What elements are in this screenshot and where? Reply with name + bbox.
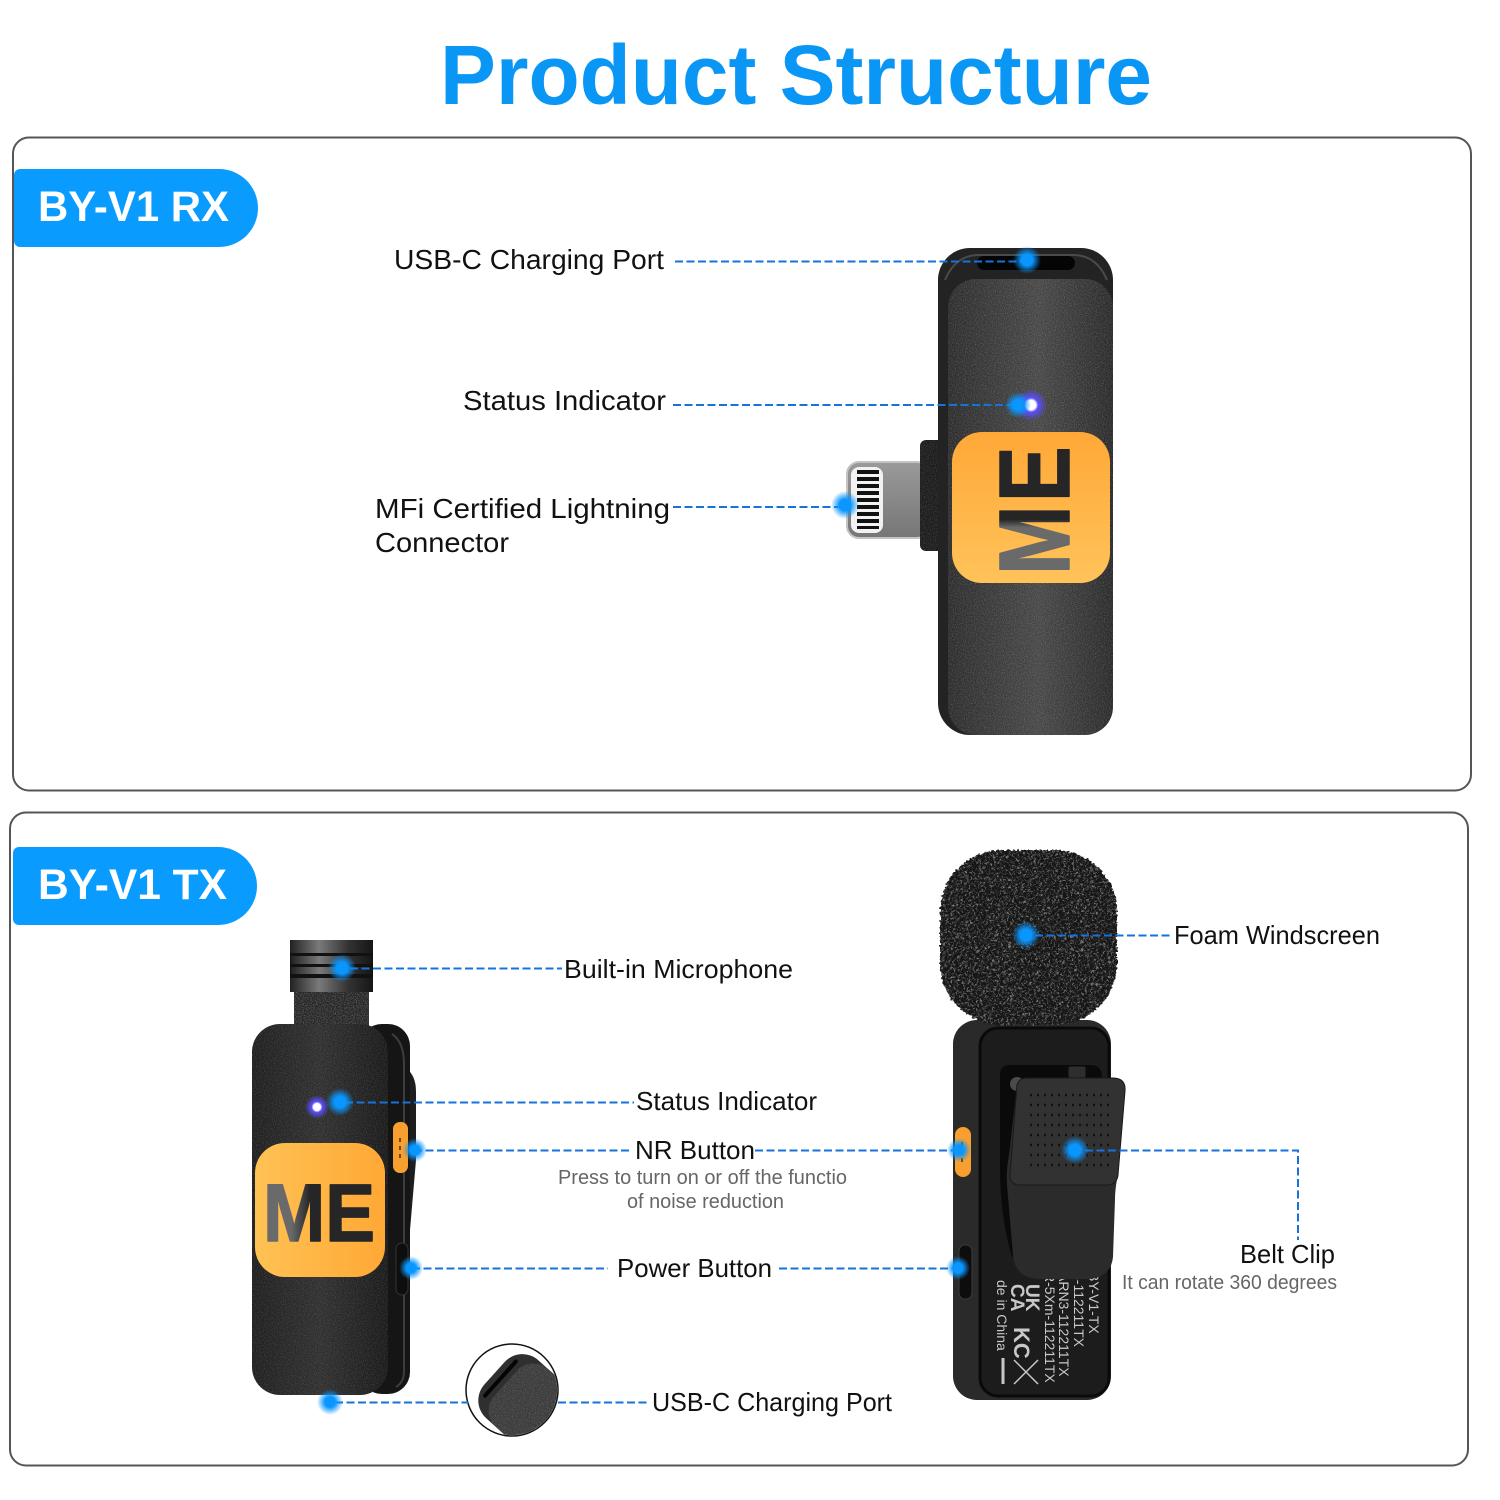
leader: status indicator — [463, 385, 1031, 418]
leader: lightning connector: MFi Certified Lightning — [375, 493, 670, 524]
leader: belt clip — [1061, 1136, 1337, 1294]
leader: power button — [399, 1253, 970, 1283]
foam windscreen — [940, 850, 1117, 1025]
regulatory markings: 3-112211TX — [1071, 1272, 1087, 1348]
leader: foam windscreen: Foam Windscreen — [1174, 920, 1380, 950]
device: RX receiver — [847, 248, 1113, 735]
ME logo plate — [952, 432, 1110, 583]
leader: built-in microphone: Built-in Microphone — [564, 954, 793, 984]
status LED — [1015, 389, 1047, 421]
leader: lightning connector: Connector — [375, 527, 509, 558]
leader: belt clip: It can rotate 360 degrees — [1122, 1272, 1337, 1294]
microphone head — [290, 940, 373, 1030]
device: TX front view — [252, 940, 416, 1395]
leader: foam windscreen — [1012, 920, 1380, 950]
title: Product Structure — [440, 28, 1152, 122]
ME logo plate: ME — [979, 443, 1091, 575]
leader: USB-C port — [394, 244, 1041, 275]
leader: USB-C charging port: USB-C Charging Port — [652, 1387, 893, 1417]
regulatory markings: de in China — [994, 1280, 1010, 1351]
side shell — [360, 1024, 410, 1394]
leader: USB-C charging port — [317, 1387, 893, 1417]
regulatory markings: CA — [1006, 1284, 1027, 1312]
leader: status indicator: Status Indicator — [463, 385, 666, 416]
regulatory markings — [994, 1272, 1102, 1384]
leader: power button: Power Button — [617, 1253, 772, 1283]
badge: BY-V1 RX: BY-V1 RX — [38, 183, 229, 231]
back panel — [980, 1028, 1109, 1396]
device: TX back view with foam and clip — [940, 850, 1125, 1400]
NR button — [393, 1122, 408, 1173]
status LED — [305, 1095, 329, 1119]
badge: BY-V1 TX — [13, 847, 257, 925]
power button — [959, 1245, 972, 1299]
regulatory markings: R-5Xm-112211TX — [1042, 1272, 1058, 1383]
leader: USB-C port: USB-C Charging Port — [394, 244, 664, 275]
leader: built-in microphone — [328, 954, 793, 984]
regulatory markings: BY-V1-TX — [1086, 1272, 1102, 1334]
leader: status indicator — [326, 1086, 817, 1116]
lightning connector — [847, 440, 950, 551]
front body — [252, 1024, 388, 1395]
regulatory markings: UK — [1021, 1284, 1042, 1312]
body — [953, 1020, 1111, 1400]
power button — [396, 1243, 408, 1295]
NR button — [955, 1127, 971, 1177]
regulatory markings: ARN3-112211TX — [1056, 1272, 1072, 1377]
ME logo plate — [255, 1143, 385, 1277]
regulatory markings: KC — [1009, 1327, 1034, 1359]
badge: BY-V1 RX — [14, 169, 258, 247]
inset: USB-C port close-up — [465, 1343, 559, 1437]
belt clip edge — [405, 1068, 416, 1230]
ME logo plate: ME — [263, 1168, 375, 1259]
badge: BY-V1 TX: BY-V1 TX — [38, 861, 227, 909]
leader: belt clip: Belt Clip — [1240, 1239, 1335, 1269]
belt clip — [1000, 1065, 1125, 1279]
leader: status indicator: Status Indicator — [636, 1086, 817, 1116]
receiver body — [938, 248, 1113, 735]
panel: BY-V1 TX — [10, 812, 1468, 1466]
panel: BY-V1 RX — [13, 138, 1471, 790]
leader: NR button: NR Button — [635, 1135, 755, 1165]
leader: NR button — [403, 1135, 971, 1213]
leader: NR button: Press to turn on or off the functio — [558, 1167, 847, 1189]
leader: lightning connector — [375, 491, 859, 558]
leader: NR button: of noise reduction — [627, 1191, 784, 1213]
USB-C port — [977, 256, 1075, 270]
